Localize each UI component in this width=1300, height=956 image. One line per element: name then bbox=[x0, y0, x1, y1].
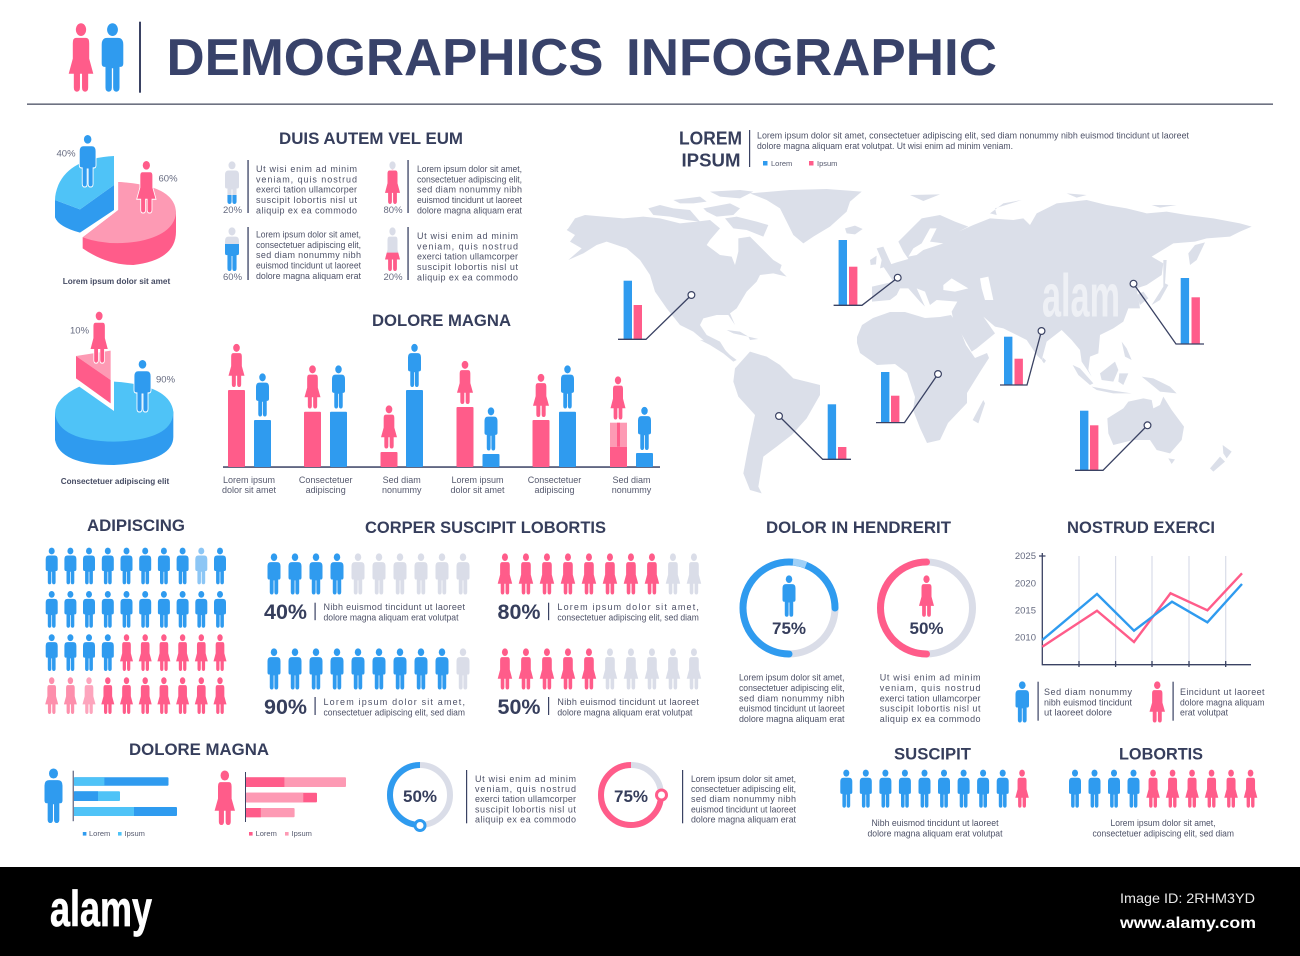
stat row: 80 percent: 80% bbox=[498, 601, 541, 624]
pie chart: 40 / 60: 40% bbox=[56, 148, 76, 160]
stat: 20 percent: suscipit lobortis nisl ut bbox=[256, 195, 357, 205]
male bars bbox=[44, 768, 177, 838]
stat: 60 percent: consectetuer adipiscing elit, bbox=[256, 240, 361, 250]
stat: 20 percent female bbox=[384, 227, 518, 283]
heading: DUIS AUTEM VEL EUM bbox=[279, 130, 463, 148]
stat row: 40 percent: dolore magna aliquam erat volutpat bbox=[324, 612, 459, 622]
panel: lobortis: Lorem ipsum dolor sit amet, bbox=[1110, 818, 1216, 828]
donut: 75 percent with text: Lorem ipsum dolor sit amet, bbox=[691, 774, 796, 784]
heading: DOLORE MAGNA bbox=[129, 741, 269, 759]
donut: 50 percent with text bbox=[390, 765, 576, 830]
footer bar: Image ID: 2RHM3YD bbox=[1120, 890, 1255, 906]
legend: male: ut laoreet dolore bbox=[1044, 708, 1112, 718]
stat: 60 percent: dolore magna aliquam erat bbox=[256, 271, 361, 281]
stat row: 90 percent: Lorem ipsum dolor sit amet, bbox=[324, 697, 465, 707]
axis labels: nonummy bbox=[382, 485, 422, 495]
heading: SUSCIPIT bbox=[894, 746, 971, 764]
stat row: 90 percent bbox=[264, 648, 470, 719]
panel: duis autem vel eum bbox=[223, 130, 522, 283]
legend: female: dolore magna aliquam bbox=[1180, 697, 1264, 707]
stat: 20 percent female: Ut wisi enim ad minim bbox=[417, 231, 518, 241]
watermark on map: alam bbox=[1042, 262, 1120, 330]
donut: 75 percent with text: 75% bbox=[614, 787, 648, 806]
donut: 50 percent with text: exerci tation ullamcorper bbox=[475, 794, 576, 804]
axis labels: adipiscing bbox=[306, 485, 346, 495]
legend: female: erat volutpat bbox=[1180, 708, 1228, 718]
legend: male bbox=[1016, 681, 1132, 722]
panel: adipiscing people grid bbox=[45, 517, 227, 714]
text block: Lorem ipsum dolor sit amet, bbox=[739, 673, 844, 683]
female bars: Lorem bbox=[256, 829, 277, 838]
heading: NOSTRUD EXERCI bbox=[1067, 519, 1215, 537]
text block bbox=[880, 673, 981, 724]
axis labels: Consectetuer bbox=[528, 475, 581, 485]
stat: 20 percent female: exerci tation ullamcorper bbox=[417, 252, 518, 262]
male bars: Lorem bbox=[89, 829, 110, 838]
legend: male: Sed diam nonummy bbox=[1044, 687, 1132, 697]
map callout: north america bbox=[618, 281, 695, 339]
stat: 80 percent: 80% bbox=[384, 205, 403, 216]
donut: 50 percent with text: suscipit lobortis nisl ut bbox=[475, 804, 576, 814]
stat: 80 percent: euismod tincidunt ut laoreet bbox=[417, 195, 522, 205]
text block: exerci tation ullamcorper bbox=[880, 693, 980, 703]
donut: 50 percent bbox=[880, 562, 972, 654]
stat: 20 percent: aliquip ex ea commodo bbox=[256, 205, 357, 215]
female bars bbox=[215, 770, 346, 838]
pie chart: 10 / 90: Consectetuer adipiscing elit bbox=[61, 476, 169, 486]
donut: 50 percent with text: 50% bbox=[403, 787, 437, 806]
stat: 20 percent female: aliquip ex ea commodo bbox=[417, 272, 518, 282]
donut: 75 percent with text bbox=[601, 765, 796, 825]
axis labels bbox=[222, 475, 652, 495]
map callout: east asia bbox=[1130, 278, 1204, 344]
panel: suscipit: Nibh euismod tincidunt ut laoreet bbox=[872, 818, 999, 828]
map heading: lorem ipsum: Lorem bbox=[771, 159, 792, 168]
stat row: 50 percent bbox=[498, 648, 701, 719]
stat: 60 percent: sed diam nonummy nibh bbox=[256, 250, 361, 260]
map heading: lorem ipsum: LOREM bbox=[679, 128, 742, 148]
pie chart: 40 / 60: Lorem ipsum dolor sit amet bbox=[63, 276, 170, 286]
header: people icons bbox=[69, 22, 141, 93]
stat row: 50 percent: 50% bbox=[498, 696, 541, 719]
panel: corper suscipit lobortis bbox=[264, 519, 701, 719]
stat: 80 percent: consectetuer adipiscing elit, bbox=[417, 174, 522, 184]
map heading: lorem ipsum: Lorem ipsum dolor sit amet, consectetuer adipiscing elit, sed diam nonummy nibh euismod tincidunt ut laoreet bbox=[757, 130, 1189, 140]
stat: 60 percent: 60% bbox=[223, 272, 243, 283]
title: INFOGRAPHIC bbox=[626, 29, 997, 87]
stat: 20 percent female: 20% bbox=[384, 272, 403, 283]
panel: suscipit bbox=[840, 746, 1029, 838]
stat row: 80 percent bbox=[498, 553, 701, 624]
text block: suscipit lobortis nisl ut bbox=[880, 704, 981, 714]
map heading: lorem ipsum: dolore magna aliquam erat volutpat. Ut wisi enim ad minim veniam. bbox=[757, 141, 1013, 151]
panel: lobortis bbox=[1069, 746, 1257, 838]
map heading: lorem ipsum: IPSUM bbox=[682, 150, 740, 170]
donut: 50 percent with text: veniam, quis nostrud bbox=[475, 784, 576, 794]
panel: nostrud exerci line chart: 2025 bbox=[1015, 551, 1036, 562]
heading: ADIPISCING bbox=[87, 517, 185, 535]
axis labels: dolor sit amet bbox=[450, 485, 505, 495]
stat: 80 percent: Lorem ipsum dolor sit amet, bbox=[417, 164, 522, 174]
axis labels: dolor sit amet bbox=[222, 485, 277, 495]
title bbox=[166, 29, 997, 87]
legend: female bbox=[1150, 681, 1265, 722]
panel: dolor in hendrerit bbox=[739, 519, 981, 724]
donut: 50 percent with text: Ut wisi enim ad minim bbox=[475, 774, 576, 784]
donut: 75 percent: 75% bbox=[772, 619, 806, 638]
donut: 50 percent: 50% bbox=[909, 619, 944, 638]
map heading: lorem ipsum bbox=[679, 128, 1189, 170]
bar chart: dolore magna bbox=[222, 312, 660, 495]
map callout: india bbox=[1000, 328, 1045, 385]
text block: veniam, quis nostrud bbox=[880, 683, 980, 693]
footer bar bbox=[0, 867, 1300, 956]
axis labels: Sed diam bbox=[612, 475, 651, 485]
stat: 20 percent: Ut wisi enim ad minim bbox=[256, 164, 357, 174]
stat: 20 percent: exerci tation ullamcorper bbox=[256, 185, 357, 195]
heading: LOBORTIS bbox=[1119, 746, 1203, 764]
stat row: 40 percent: 40% bbox=[264, 601, 307, 624]
panel: nostrud exerci line chart: 2010 bbox=[1015, 632, 1036, 643]
footer bar: www.alamy.com bbox=[1119, 915, 1256, 932]
stat: 60 percent: Lorem ipsum dolor sit amet, bbox=[256, 230, 361, 240]
axis labels: Sed diam bbox=[383, 475, 421, 485]
stat row: 40 percent: Nibh euismod tincidunt ut laoreet bbox=[324, 602, 465, 612]
stat row: 50 percent: dolore magna aliquam erat volutpat bbox=[557, 708, 693, 718]
female bars: Ipsum bbox=[292, 829, 312, 838]
legend: female: Eincidunt ut laoreet bbox=[1180, 687, 1265, 697]
donut: 75 percent with text: sed diam nonummy nibh bbox=[691, 794, 796, 804]
text block: euismod tincidunt ut laoreet bbox=[739, 704, 845, 714]
axis labels: nonummy bbox=[612, 485, 652, 495]
stat row: 40 percent bbox=[264, 553, 470, 624]
panel: nostrud exerci line chart bbox=[1015, 519, 1265, 722]
stat: 60 percent: euismod tincidunt ut laoreet bbox=[256, 260, 361, 270]
stat: 20 percent: veniam, quis nostrud bbox=[256, 174, 357, 184]
map callout: australia bbox=[1075, 411, 1151, 470]
donut: 75 percent with text: dolore magna aliquam erat bbox=[691, 815, 796, 825]
panel: dolore magna horizontal bars bbox=[44, 741, 346, 838]
stat row: 90 percent: 90% bbox=[264, 696, 307, 719]
pie chart: 40 / 60 bbox=[55, 134, 178, 286]
map callout: europe bbox=[834, 240, 901, 305]
heading: DOLORE MAGNA bbox=[372, 312, 511, 330]
axis labels: Lorem ipsum bbox=[451, 475, 504, 485]
map callout: south america bbox=[776, 404, 851, 459]
map callout: africa bbox=[876, 371, 941, 423]
male bars: Ipsum bbox=[124, 829, 145, 838]
axis labels: Lorem ipsum bbox=[223, 475, 275, 485]
stat: 20 percent female: veniam, quis nostrud bbox=[417, 241, 518, 251]
heading: DOLOR IN HENDRERIT bbox=[766, 519, 951, 537]
stat: 80 percent: dolore magna aliquam erat bbox=[417, 205, 522, 215]
panel: nostrud exerci line chart: 2020 bbox=[1015, 578, 1036, 589]
text block: aliquip ex ea commodo bbox=[880, 714, 980, 724]
donut: 75 percent with text: consectetuer adipiscing elit, bbox=[691, 784, 796, 794]
stat: 60 percent bbox=[223, 227, 361, 283]
stat: 80 percent bbox=[384, 160, 522, 216]
text block: consectetuer adipiscing elit, bbox=[739, 683, 844, 693]
stat: 20 percent female: suscipit lobortis nisl ut bbox=[417, 262, 518, 272]
heading: CORPER SUSCIPIT LOBORTIS bbox=[365, 519, 606, 537]
legend: male: nibh euismod tincidunt bbox=[1044, 697, 1132, 707]
text block: Ut wisi enim ad minim bbox=[880, 673, 980, 683]
pie chart: 10 / 90: 90% bbox=[156, 374, 176, 386]
panel: suscipit: dolore magna aliquam erat volutpat bbox=[868, 828, 1003, 838]
panel: lobortis: consectetuer adipiscing elit, sed diam bbox=[1092, 828, 1234, 838]
text block: sed diam nonummy nibh bbox=[739, 693, 844, 703]
footer bar: alamy bbox=[50, 881, 152, 937]
text block bbox=[739, 673, 845, 724]
panel: nostrud exerci line chart: 2015 bbox=[1015, 605, 1036, 616]
pie chart: 10 / 90: 10% bbox=[70, 326, 90, 336]
donut: 50 percent with text: aliquip ex ea commodo bbox=[475, 815, 576, 825]
stat row: 80 percent: consectetuer adipiscing elit, sed diam bbox=[557, 612, 699, 622]
donut: 75 percent bbox=[743, 562, 835, 654]
axis labels: adipiscing bbox=[534, 485, 575, 495]
stat: 20 percent: 20% bbox=[223, 205, 243, 216]
text block: dolore magna aliquam erat bbox=[739, 714, 845, 724]
stat: 20 percent bbox=[223, 160, 357, 216]
world map bbox=[567, 189, 1252, 493]
map heading: lorem ipsum: Ipsum bbox=[817, 159, 837, 168]
stat row: 90 percent: consectetuer adipiscing elit, sed diam bbox=[324, 708, 465, 718]
donut: 75 percent with text: euismod tincidunt ut laoreet bbox=[691, 804, 796, 814]
title: DEMOGRAPHICS bbox=[166, 29, 604, 87]
pie chart: 10 / 90 bbox=[55, 311, 176, 486]
stat row: 80 percent: Lorem ipsum dolor sit amet, bbox=[557, 602, 699, 612]
stat: 80 percent: sed diam nonummy nibh bbox=[417, 185, 522, 195]
stat row: 50 percent: Nibh euismod tincidunt ut laoreet bbox=[557, 697, 699, 707]
pie chart: 40 / 60: 60% bbox=[158, 174, 178, 184]
axis labels: Consectetuer bbox=[299, 475, 352, 485]
